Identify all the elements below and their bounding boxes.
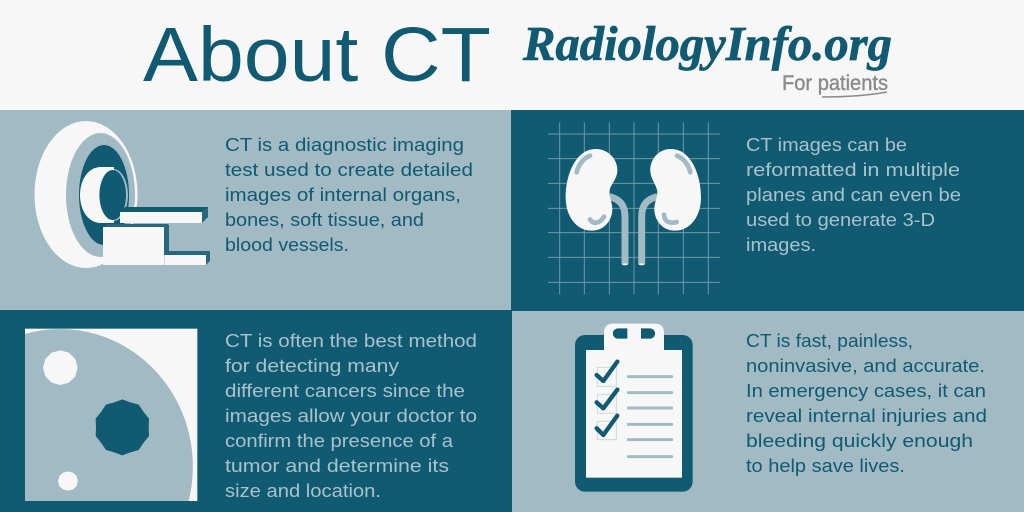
logo: RadiologyInfo.org For patients: RadiologyInfo.org — [522, 16, 892, 71]
logo: RadiologyInfo.org For patients: For patients — [782, 72, 888, 95]
text: definition: images of internal organs, — [225, 184, 461, 205]
text: cancer detection: size and location. — [225, 480, 381, 501]
text: definition: blood vessels. — [225, 234, 349, 255]
text: cancer detection: CT is often the best method — [225, 330, 477, 351]
panel: benefits — [512, 311, 1024, 512]
text: cancer detection — [225, 330, 477, 501]
text: reformatting: used to generate 3-D — [746, 209, 935, 230]
icon: scan with tumors — [25, 329, 197, 501]
logo: RadiologyInfo.org For patients — [522, 16, 892, 97]
panel: multiplanar images — [511, 110, 1024, 311]
text: benefits: noninvasive, and accurate. — [746, 355, 985, 376]
text: cancer detection: images allow your doctor to — [225, 405, 477, 426]
text: definition: bones, soft tissue, and — [225, 209, 424, 230]
header background — [0, 0, 1024, 110]
text: benefits: bleeding quickly enough — [746, 430, 973, 451]
text: reformatting: planes and can even be — [746, 184, 961, 205]
title: About CT — [143, 12, 491, 98]
text: definition: CT is a diagnostic imaging — [225, 134, 464, 155]
text: cancer detection: for detecting many — [225, 355, 400, 376]
text: cancer detection: confirm the presence of a — [225, 430, 454, 451]
icon: kidneys on grid — [548, 122, 720, 294]
text: benefits: In emergency cases, it can — [746, 380, 986, 401]
text: reformatting: CT images can be — [746, 134, 907, 155]
text: cancer detection: different cancers since the — [225, 380, 465, 401]
text: reformatting — [746, 134, 961, 255]
icon: clipboard checklist — [575, 324, 693, 492]
text: cancer detection: tumor and determine its — [225, 455, 449, 476]
panel: what CT is — [0, 110, 511, 310]
text: definition — [225, 134, 473, 255]
text: benefits: CT is fast, painless, — [746, 330, 913, 351]
icon: CT scanner — [34, 121, 210, 268]
text: benefits: reveal internal injuries and — [746, 405, 987, 426]
text: benefits — [746, 330, 987, 476]
text: reformatting: reformatted in multiple — [746, 159, 960, 180]
text: benefits: to help save lives. — [746, 455, 905, 476]
panel: cancer detection — [0, 310, 512, 512]
text: reformatting: images. — [746, 234, 816, 255]
text: definition: test used to create detailed — [225, 159, 473, 180]
